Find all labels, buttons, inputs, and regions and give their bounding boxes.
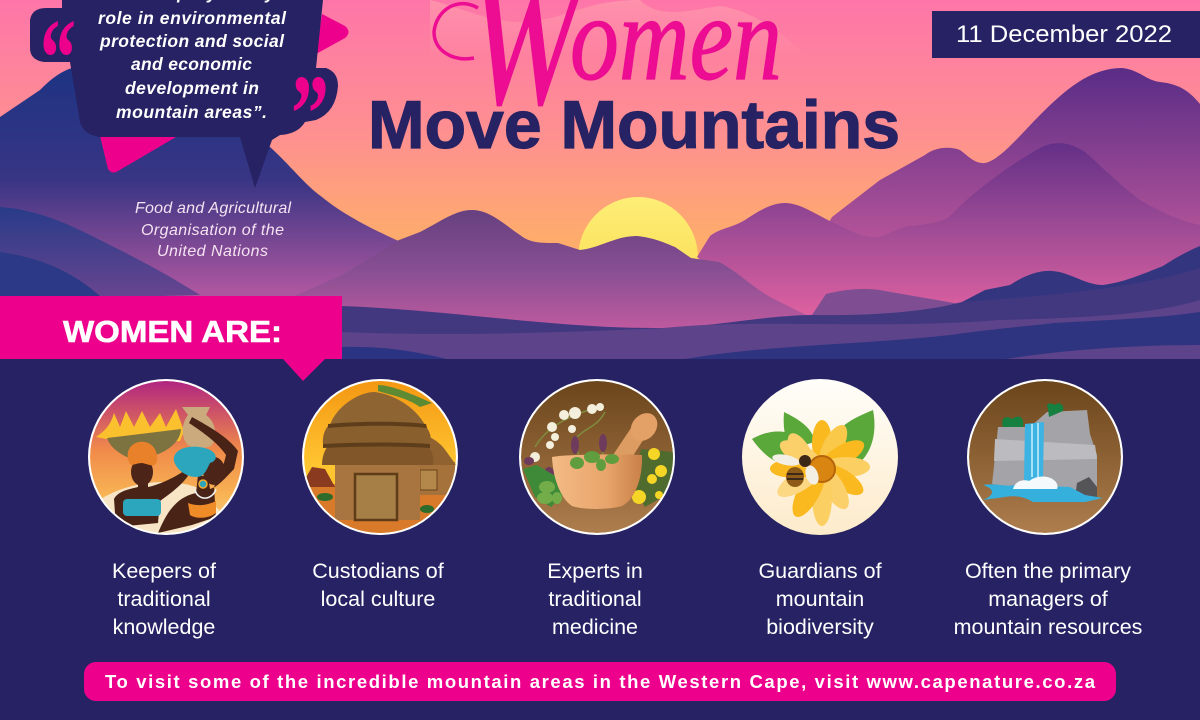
quote attribution: United Nations (157, 243, 268, 260)
quote text (98, 0, 287, 122)
bubble accent: lower pink triangle (100, 136, 176, 173)
label: managers: Often the primary (965, 559, 1131, 583)
label: guardians (758, 559, 882, 639)
right blue ridge (900, 246, 1200, 345)
label: guardians: Guardians of (758, 559, 882, 583)
label: keepers: knowledge (113, 615, 215, 639)
label: keepers (112, 559, 216, 639)
foreground hill band: upper (342, 268, 1200, 360)
quote attribution: Organisation of the (141, 222, 284, 239)
quote text: development in (125, 78, 259, 98)
banner: women are: WOMEN ARE: (63, 314, 282, 349)
icon: waterfall (967, 379, 1123, 535)
title: script word (434, 0, 782, 144)
date badge: 11 December 2022 (956, 21, 1172, 48)
opening quote mark: “ (40, 0, 76, 121)
label: guardians: biodiversity (766, 615, 874, 639)
icon: mortar, pestle and herbs (519, 379, 675, 535)
quote speech bubble (30, 0, 348, 188)
label: keepers: Keepers of (112, 559, 216, 583)
label: custodians (312, 559, 444, 611)
bubble accent: right pink triangle (316, 14, 348, 54)
pale distant hills (430, 0, 810, 60)
label: managers: managers of (988, 587, 1108, 611)
title: main heading: Move Mountains (368, 87, 900, 163)
label: experts: Experts in (547, 559, 643, 583)
foreground hill band: lower purple (342, 300, 1200, 360)
mountain range: front centre (285, 210, 806, 345)
quote text: role in environmental (98, 8, 287, 28)
quote text: and economic (131, 54, 252, 74)
foreground strip: blue at left (342, 347, 450, 360)
quote text: protection and social (99, 31, 285, 51)
label: experts: medicine (552, 615, 638, 639)
mountain range: middle right (697, 143, 1200, 345)
small mid-ground peak (800, 289, 962, 330)
label: keepers: traditional (117, 587, 211, 611)
label: experts: traditional (548, 587, 642, 611)
foreground hill band: blue wedge (680, 312, 1200, 360)
bee (771, 452, 821, 487)
left foreground hills (0, 207, 200, 300)
mountain range: far right (760, 68, 1200, 340)
icon: sunflower and bee (742, 379, 898, 535)
bubble body (30, 0, 338, 188)
banner: women are (0, 296, 342, 381)
sun (578, 197, 698, 319)
date badge (932, 11, 1200, 58)
label: managers: mountain resources (954, 615, 1142, 639)
label: experts (547, 559, 643, 639)
closing quote mark: ” (291, 53, 329, 177)
sunflower centre (809, 456, 835, 482)
background: sunset sky (0, 0, 1200, 360)
icon: thatched hut (302, 379, 458, 535)
panel: navy lower section (0, 359, 1200, 720)
sunflower petals (770, 420, 870, 526)
call to action bar (84, 662, 1116, 701)
sunflower leaves (752, 410, 874, 466)
label: guardians: mountain (776, 587, 864, 611)
label: custodians: local culture (321, 587, 435, 611)
quote attribution: Food and Agricultural (135, 200, 291, 217)
label: custodians: Custodians of (312, 559, 444, 583)
icon: two women carrying baskets (88, 379, 244, 535)
mountain range: left blue peak (0, 66, 405, 300)
title (368, 0, 900, 163)
quote text: mountain areas”. (116, 102, 267, 122)
label: managers (954, 559, 1142, 639)
quote attribution (135, 200, 291, 260)
call to action bar: To visit some of the incredible mountain areas in the Western Cape, visit www.capenature.co.za (105, 671, 1096, 692)
